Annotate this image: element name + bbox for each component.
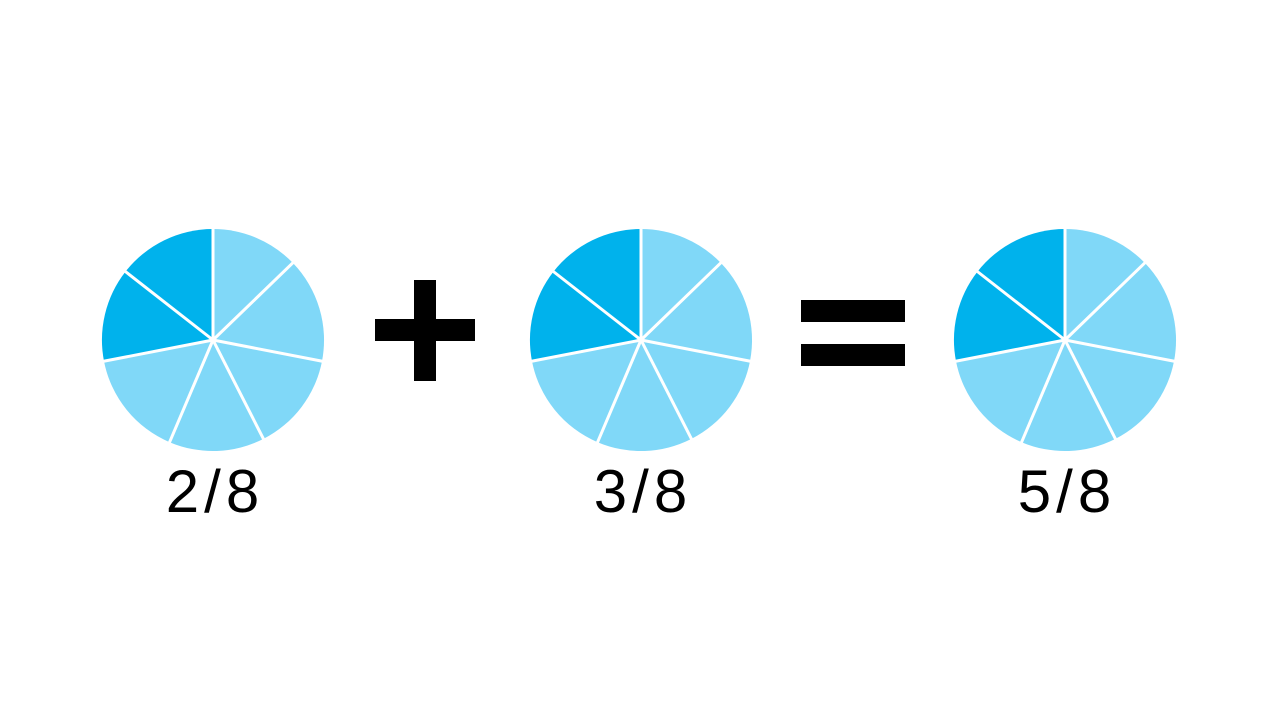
plus sign	[375, 280, 475, 381]
pie: 2/8	[102, 228, 324, 451]
label 3/8: 3/8	[594, 458, 692, 525]
label 5/8: 5/8	[1018, 458, 1116, 525]
pie: 3/8	[530, 228, 752, 451]
label 2/8: 2/8	[166, 458, 264, 525]
equals sign	[801, 300, 905, 366]
pie: 5/8	[954, 228, 1176, 451]
